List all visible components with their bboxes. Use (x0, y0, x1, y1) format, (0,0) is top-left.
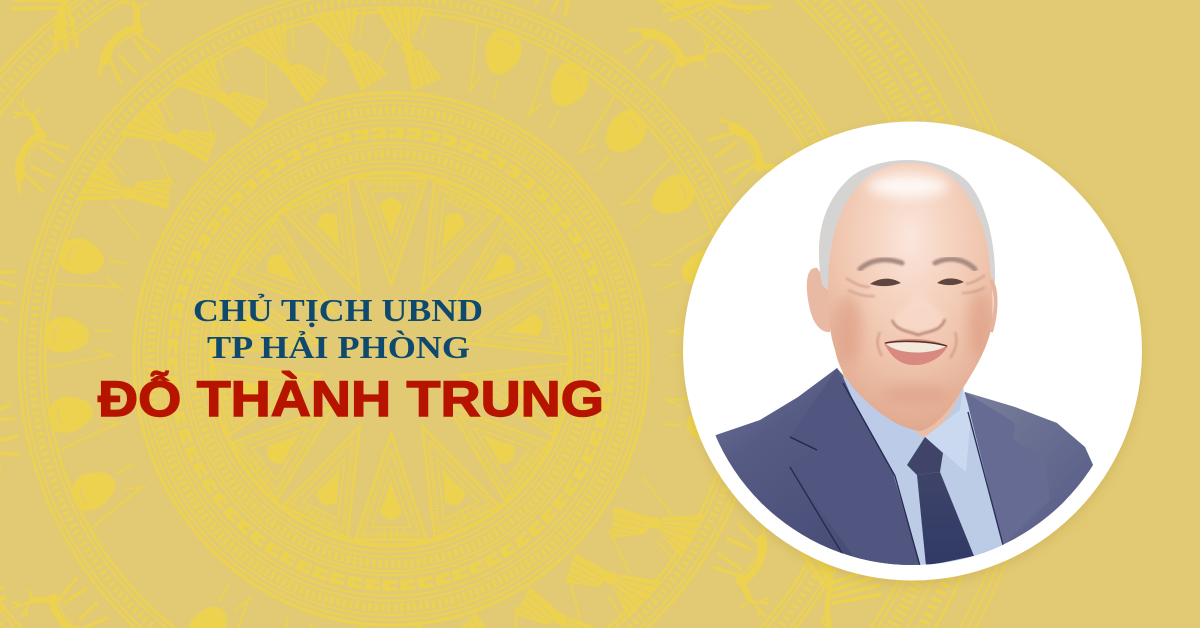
left lapel (826, 368, 920, 565)
hair (819, 160, 995, 292)
nose (892, 288, 945, 332)
heading: position: CHỦ TỊCH UBND (193, 292, 483, 328)
smile lines (878, 332, 956, 358)
bronze drum pattern: middle ring with deer and birds (0, 0, 803, 628)
eyes (870, 279, 901, 286)
smile (884, 339, 948, 365)
left collar (843, 377, 923, 438)
suit jacket left (716, 368, 911, 565)
portrait circle (682, 122, 1144, 586)
right-side ear edge (991, 280, 996, 332)
tie (907, 437, 943, 475)
head (807, 160, 996, 431)
right collar (925, 388, 971, 472)
cheek shading (834, 291, 992, 404)
heading: position: TP HẢI PHÒNG (207, 329, 470, 365)
forehead highlight (868, 175, 948, 197)
heading: name: ĐỖ THÀNH TRUNG (98, 371, 604, 427)
bronze drum pattern: inner medallion with star panels (134, 93, 648, 625)
shirt (843, 377, 1003, 565)
eyebrows (860, 259, 975, 269)
face (828, 163, 993, 431)
portrait: man in suit (716, 368, 1093, 565)
wrinkles (846, 275, 985, 296)
heading: position (193, 292, 483, 365)
right lapel (965, 392, 1015, 545)
neck (842, 370, 961, 438)
suit jacket right (928, 392, 1093, 564)
left ear (807, 268, 834, 332)
